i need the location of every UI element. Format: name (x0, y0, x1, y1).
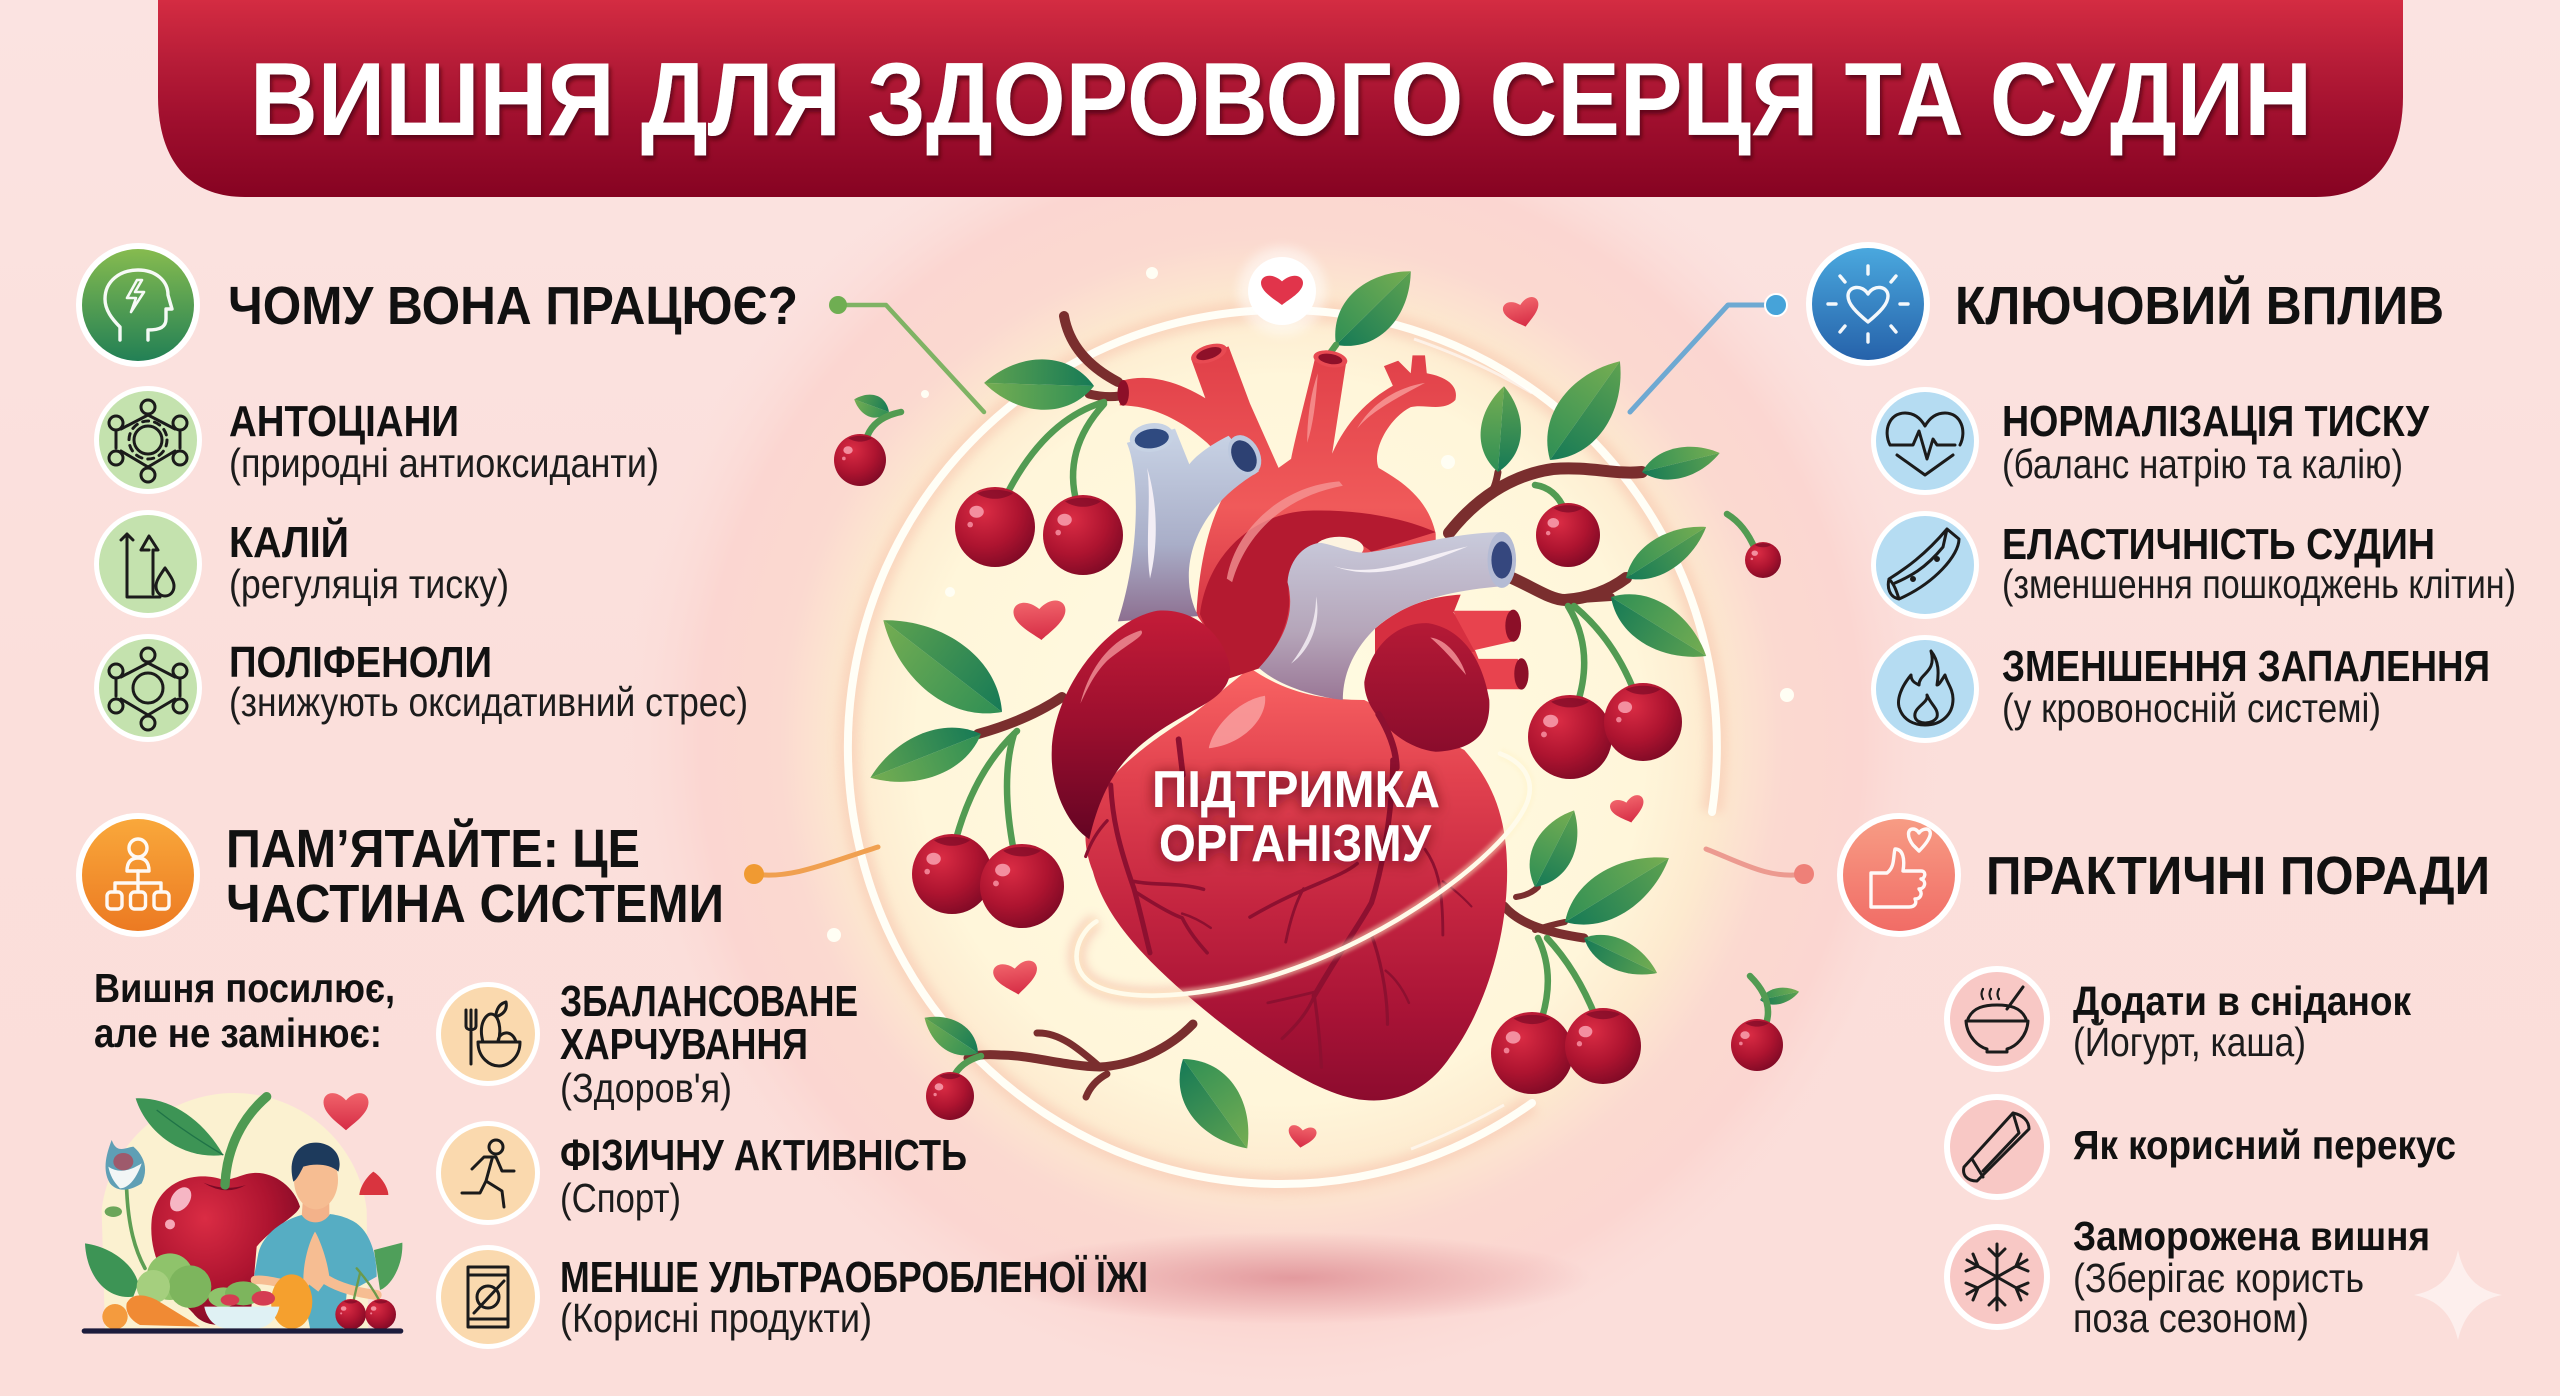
icon: head with bolt (76, 243, 200, 367)
illustration: apple, person and vegetables (82, 1093, 403, 1334)
panel: key impact (1806, 242, 2516, 743)
center label (1152, 761, 1440, 873)
item: polyphenols: (знижують оксидативний стрес) (229, 679, 748, 725)
item: frozen cherry: Заморожена вишня (2073, 1213, 2430, 1259)
item: frozen cherry: поза сезоном) (2073, 1295, 2309, 1341)
item: less ultra-processed food: (Корисні продукти) (560, 1295, 872, 1341)
coronary vessels (1086, 714, 1471, 1067)
item: vessel elasticity: ЕЛАСТИЧНІСТЬ СУДИН (2002, 520, 2435, 569)
item: breakfast: Додати в сніданок (2073, 978, 2411, 1024)
panel: practical tips (1837, 813, 2490, 1341)
item: breakfast (1944, 966, 2411, 1072)
item: pressure normalization (1871, 387, 2430, 495)
cherries (834, 434, 1783, 1120)
item: snack (1944, 1094, 2456, 1200)
item: pressure normalization: (баланс натрію та калію) (2002, 441, 2403, 487)
heart body (1085, 668, 1507, 1101)
icon: thumbs up with heart (1837, 813, 1961, 937)
title: ВИШНЯ ДЛЯ ЗДОРОВОГО СЕРЦЯ ТА СУДИН (250, 42, 2312, 158)
item: balanced nutrition (436, 977, 858, 1111)
item: anthocyanins (94, 386, 659, 494)
item: pressure normalization: НОРМАЛІЗАЦІЯ ТИСКУ (2002, 397, 2430, 446)
item: balanced nutrition: (Здоров'я) (560, 1065, 732, 1111)
watermark star (2414, 1250, 2502, 1340)
panel: part of the system (76, 813, 1148, 1349)
heading: КЛЮЧОВИЙ ВПЛИВ (1955, 275, 2444, 336)
icon: heart with rays (1806, 242, 1930, 366)
item: frozen cherry (1944, 1213, 2430, 1341)
item: frozen cherry: (Зберігає користь (2073, 1255, 2364, 1301)
icon: org chart (76, 813, 200, 937)
connector: blue (1630, 294, 1787, 412)
left atrium (1052, 610, 1230, 839)
item: balanced nutrition: ХАРЧУВАННЯ (560, 1020, 808, 1069)
text: cherry enhances: Вишня посилює, (94, 965, 395, 1011)
left vein (1118, 420, 1268, 621)
floor shadow (993, 1232, 1593, 1324)
leaves (850, 253, 1801, 1164)
item: less ultra-processed food: МЕНШЕ УЛЬТРАОБРОБЛЕНОЇ ЇЖІ (560, 1253, 1148, 1302)
central illustration: heart and cherries (827, 247, 1801, 1184)
item: breakfast: (Йогурт, каша) (2073, 1019, 2306, 1065)
item: potassium: (регуляція тиску) (229, 561, 509, 607)
text: cherry enhances: але не замінює: (94, 1010, 382, 1056)
cherry stems (866, 345, 1768, 1078)
badge with heart (1238, 247, 1326, 335)
item: balanced nutrition: ЗБАЛАНСОВАНЕ (560, 977, 858, 1026)
center label: ОРГАНІЗМУ (1159, 815, 1432, 873)
item: anthocyanins: АНТОЦІАНИ (229, 397, 459, 446)
right vein (1259, 532, 1516, 700)
sparkle dots (827, 267, 1794, 942)
connector: salmon (1706, 849, 1814, 884)
anatomical heart (1052, 340, 1530, 1101)
orbit ring (1077, 754, 1530, 996)
item: physical activity: (Спорт) (560, 1175, 681, 1221)
orbit ring rear glow (1077, 921, 1286, 996)
glowing ring (848, 310, 1717, 1184)
text: cherry enhances (94, 965, 395, 1056)
floating hearts (992, 295, 1648, 1150)
item: inflammation reduction (1871, 635, 2490, 743)
aorta and pulmonary arch (1120, 346, 1456, 668)
branches (968, 316, 1642, 1097)
item: vessel elasticity (1871, 511, 2516, 619)
item: potassium: КАЛІЙ (229, 516, 349, 567)
center label: ПІДТРИМКА (1152, 761, 1440, 819)
item: polyphenols: ПОЛІФЕНОЛИ (229, 638, 492, 687)
connector: orange (744, 847, 878, 884)
central glow (621, 80, 1941, 1396)
heading: ЧОМУ ВОНА ПРАЦЮЄ? (228, 276, 798, 336)
inner arch (1200, 510, 1436, 679)
title banner (158, 0, 2403, 197)
item: anthocyanins: (природні антиоксиданти) (229, 440, 659, 486)
right small arteries (1454, 610, 1529, 690)
item: physical activity (436, 1121, 967, 1225)
item: potassium (94, 510, 509, 618)
heading: ПАМ’ЯТАЙТЕ: ЦЕ (226, 818, 640, 879)
heading: ЧАСТИНА СИСТЕМИ (226, 874, 724, 934)
connector: green (829, 296, 984, 412)
item: snack: Як корисний перекус (2073, 1122, 2456, 1168)
right atrium (1364, 623, 1489, 752)
item: less ultra-processed food (436, 1245, 1148, 1349)
heading: ПРАКТИЧНІ ПОРАДИ (1986, 846, 2490, 906)
heading (226, 818, 724, 934)
item: physical activity: ФІЗИЧНУ АКТИВНІСТЬ (560, 1131, 967, 1180)
item: inflammation reduction: (у кровоносній системі) (2002, 685, 2381, 731)
item: polyphenols (94, 634, 748, 742)
panel: why it works (76, 243, 798, 742)
